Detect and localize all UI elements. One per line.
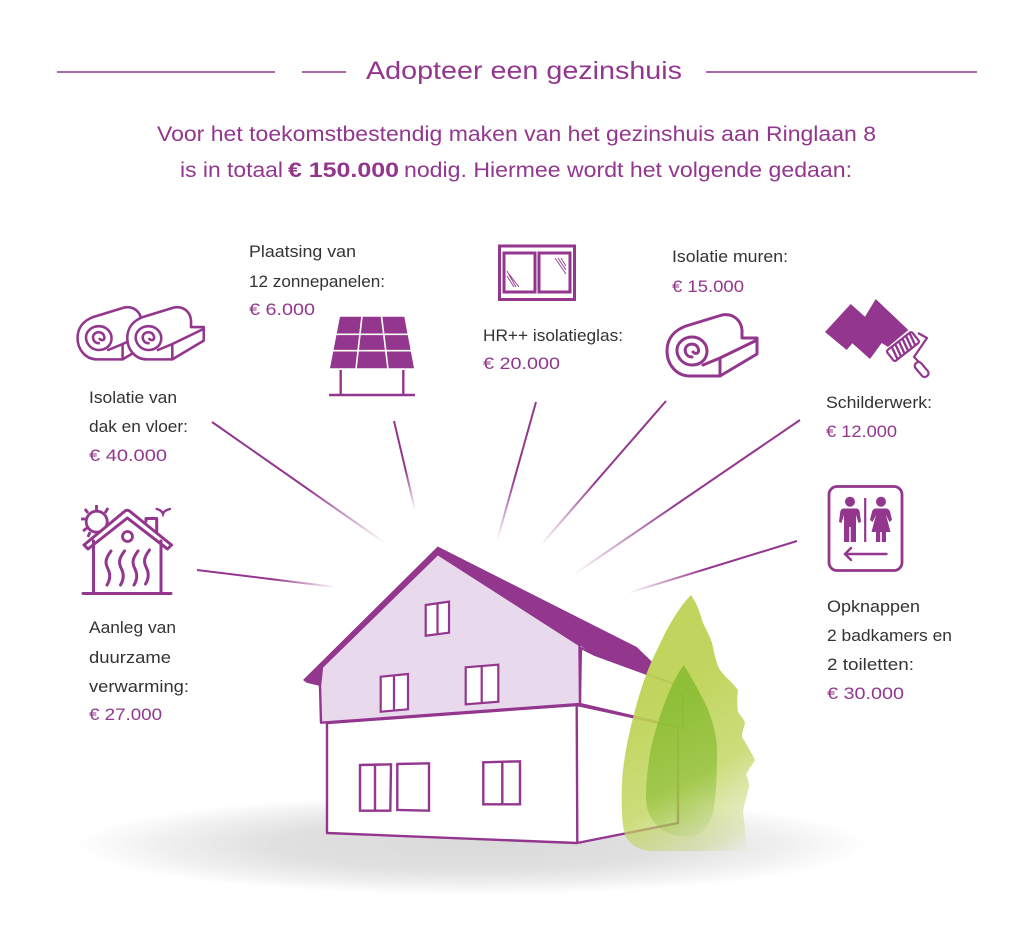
label: Aanleg van [89, 619, 176, 637]
item: bathrooms and toilets: 2 badkamers en [827, 627, 952, 645]
icon: window [500, 246, 574, 300]
item: wall insulation: € 15.000 [672, 278, 744, 296]
roof [303, 546, 652, 686]
item: sustainable heating: duurzame [89, 649, 171, 667]
lilac gable [320, 554, 580, 723]
connector lines [197, 401, 800, 593]
item: painting: € 12.000 [826, 423, 897, 441]
icon: solar panel [329, 316, 415, 395]
intro text [157, 122, 876, 182]
intro text: is in totaal [180, 158, 283, 182]
intro text: € 150.000 [288, 158, 399, 182]
item: roof and floor insulation [78, 307, 204, 465]
item: solar panels: € 6.000 [249, 301, 315, 319]
icon: insulation roll [667, 315, 757, 376]
item: roof and floor insulation: € 40.000 [89, 447, 167, 465]
label: Isolatie van [89, 389, 177, 407]
lower windows [360, 761, 520, 811]
upper windows [381, 602, 498, 712]
icon: heated house [81, 505, 172, 594]
item: sustainable heating: verwarming: [89, 678, 189, 696]
item: sustainable heating: € 27.000 [89, 706, 162, 724]
label: HR++ isolatieglas: [483, 327, 623, 345]
item: roof and floor insulation: dak en vloer: [89, 418, 188, 436]
label: Schilderwerk: [826, 394, 932, 412]
item: sustainable heating [81, 505, 189, 724]
item: HR++ glazing [483, 246, 623, 373]
intro text: Voor het toekomstbestendig maken van het gezinshuis aan Ringlaan 8 [157, 122, 876, 146]
item: wall insulation [667, 248, 788, 376]
lower walls [327, 705, 683, 843]
item: solar panels [249, 243, 415, 395]
item: bathrooms and toilets: 2 toiletten: [827, 656, 914, 674]
intro text: nodig. Hiermee wordt het volgende gedaan: [404, 158, 852, 182]
label: Plaatsing van [249, 243, 356, 261]
item: bathrooms and toilets [827, 486, 952, 703]
item: solar panels: 12 zonnepanelen: [249, 273, 385, 291]
item: bathrooms and toilets: € 30.000 [827, 685, 904, 703]
title: Adopteer een gezinshuis [366, 57, 682, 85]
tree [622, 595, 755, 851]
item: painting [825, 299, 932, 441]
house illustration [303, 546, 688, 843]
label: Isolatie muren: [672, 248, 788, 266]
ground shadow [77, 795, 867, 895]
icon: restroom sign [829, 486, 902, 570]
label: Opknappen [827, 598, 920, 616]
icon: paint swatch and roller [825, 299, 930, 378]
icon: two insulation rolls [78, 307, 204, 359]
upper side wall [580, 648, 688, 728]
item: HR++ glazing: € 20.000 [483, 355, 560, 373]
